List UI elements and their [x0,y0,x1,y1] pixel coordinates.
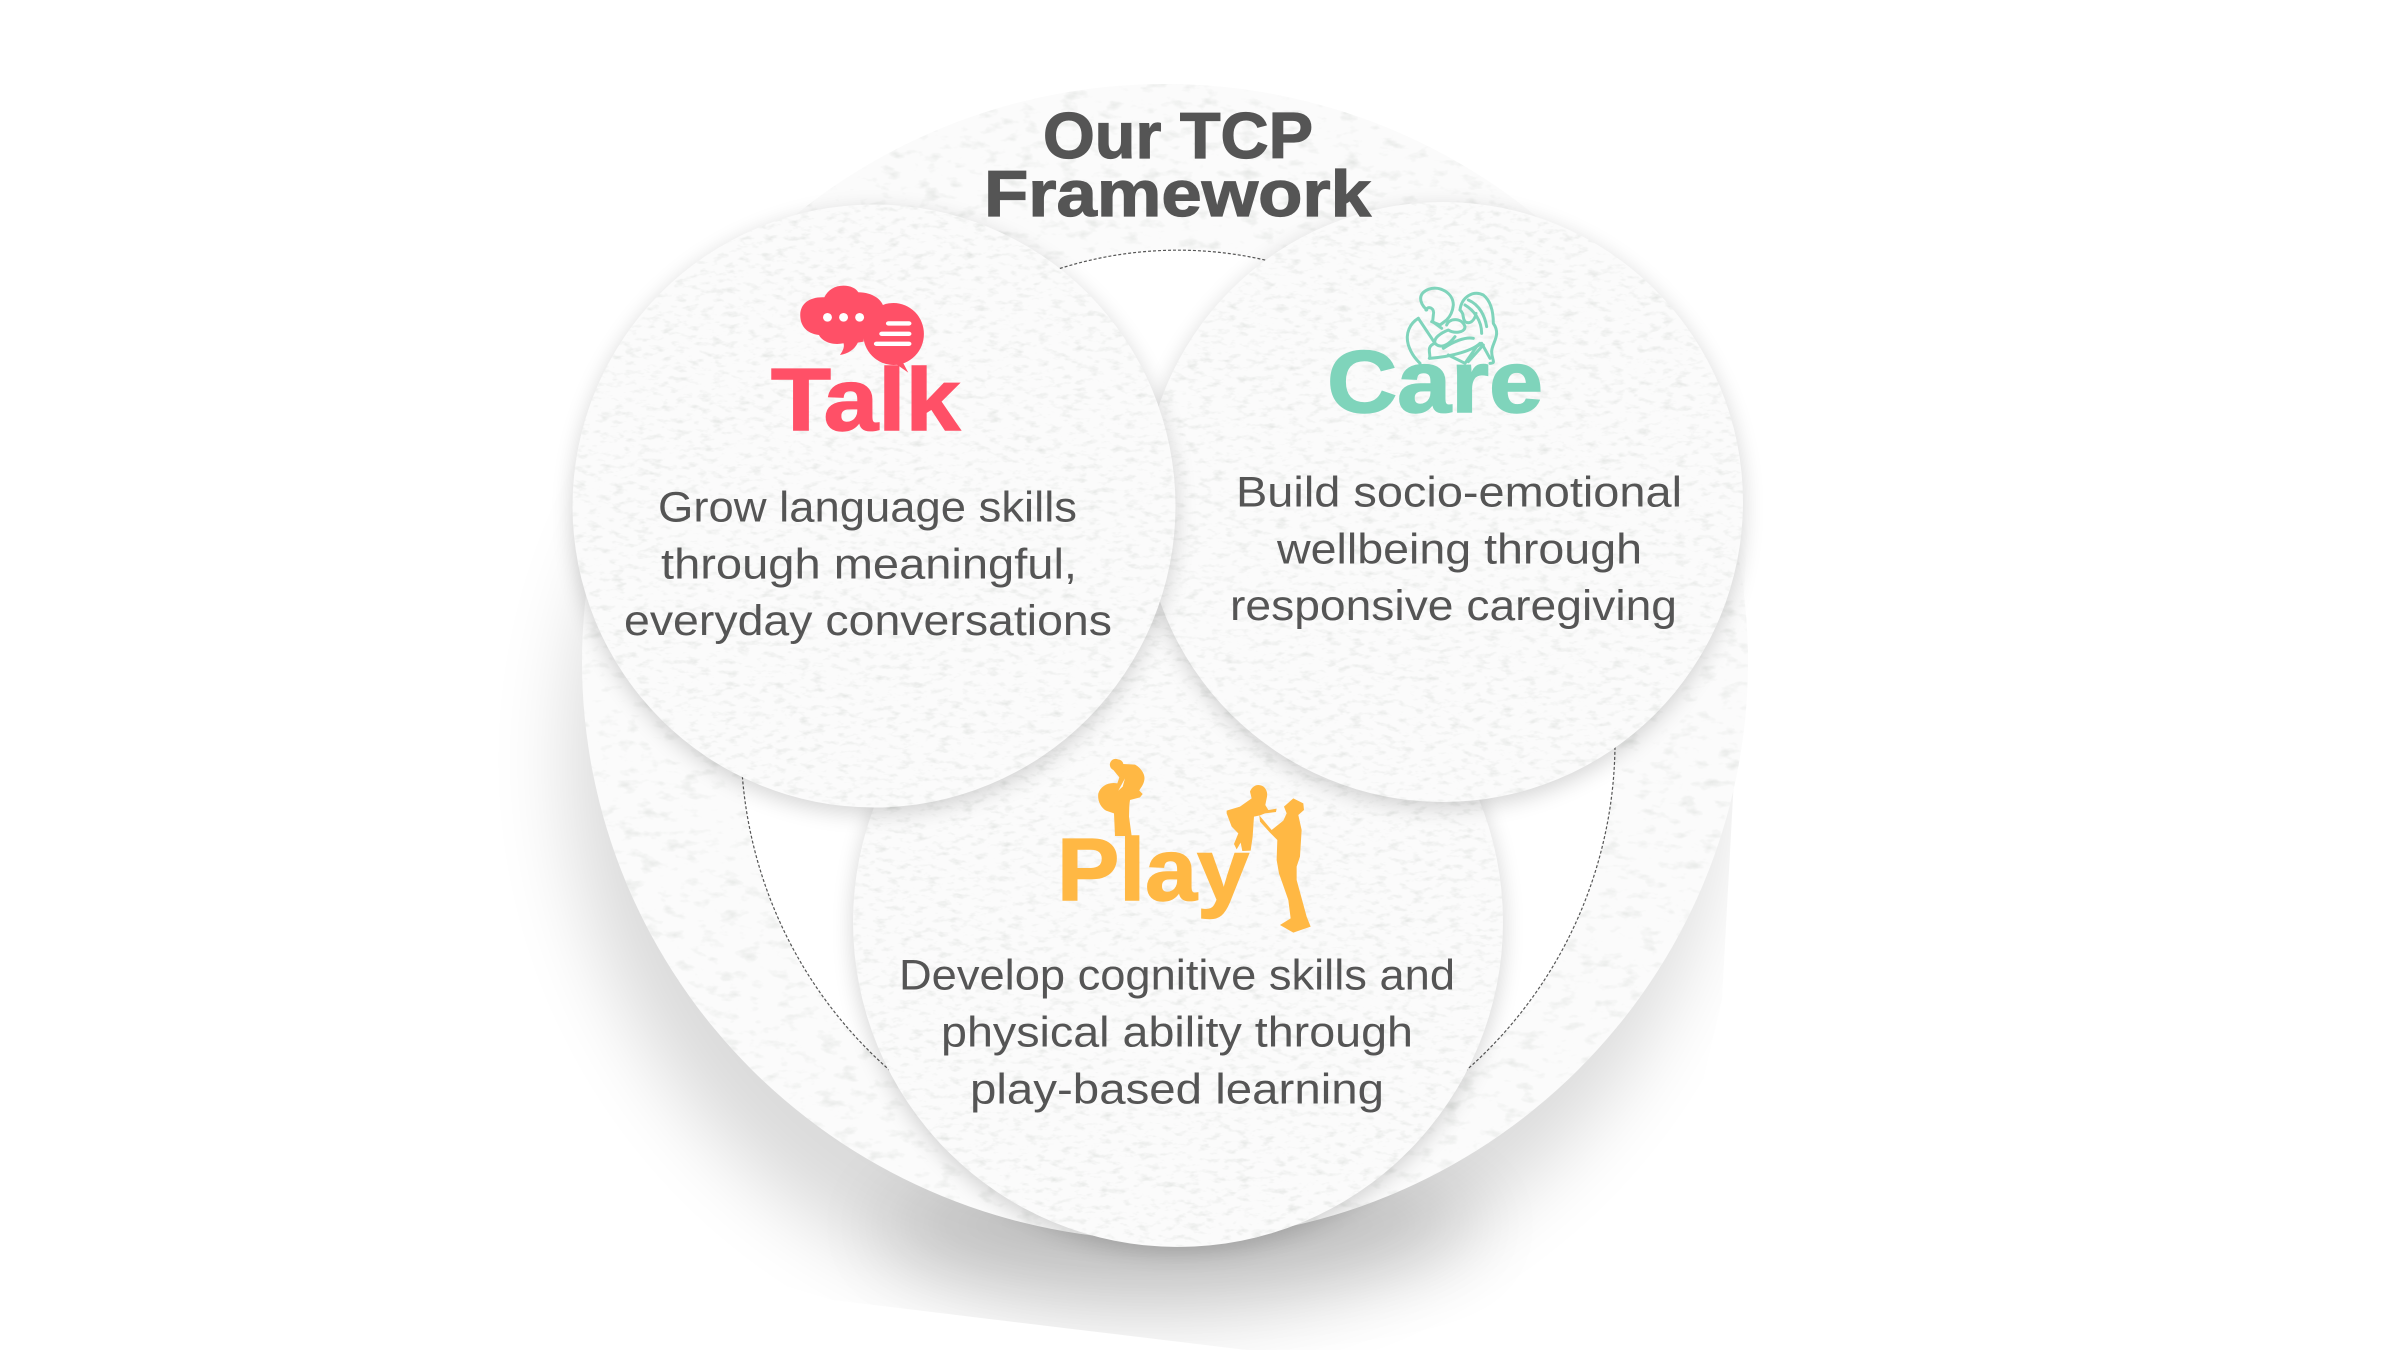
heading: Talk: Talk [771,350,961,449]
title [984,99,1372,230]
description: play: physical ability through [941,1008,1413,1056]
panel: play [853,597,1503,1253]
icon: speech bubbles [800,286,924,373]
panel: outer paper ring [582,84,1748,1240]
description: talk: through meaningful, [661,540,1077,588]
description: care [1230,468,1682,630]
description: care: wellbeing through [1276,526,1642,574]
panel: talk [572,204,1176,814]
description: play [899,952,1455,1114]
inner white area with dashed outline [741,250,1615,1179]
icon: parent lifting child and parent lifting toddler [1098,759,1311,933]
description: talk: Grow language skills [658,484,1077,532]
description: care: responsive caregiving [1230,582,1677,630]
description: play: Develop cognitive skills and [899,952,1455,1000]
description: care: Build socio-emotional [1236,468,1682,516]
icon: family embrace [1407,288,1497,363]
outer drop shadow [544,566,1733,1346]
heading: Care: Care [1327,332,1543,431]
description: talk [624,484,1112,645]
description: talk: everyday conversations [624,597,1112,645]
panel: care [1143,202,1743,808]
heading: Play: Play [1057,820,1249,919]
description: play: play-based learning [970,1066,1384,1114]
title: Framework [984,157,1372,230]
title: Our TCP [1043,99,1313,172]
